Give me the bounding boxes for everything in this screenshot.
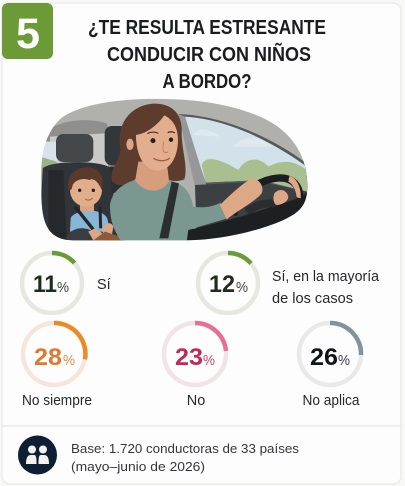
side window (178, 114, 310, 197)
chart: 23% No (164, 323, 226, 385)
chart: 12% Sí, en la mayoría de los casos (198, 253, 258, 313)
door (195, 182, 306, 230)
child (70, 211, 110, 232)
title: CONDUCIR CON NIÑOS (107, 43, 311, 66)
question number badge (2, 3, 53, 59)
question number badge: 5 (16, 10, 40, 58)
chart: 26% No aplica: 26 (310, 344, 338, 371)
chart: 23% No: % (203, 352, 215, 369)
mother neck and face (135, 162, 169, 191)
label: No siempre: No siempre (22, 393, 92, 409)
label: Sí, en la mayoría de los casos: de los casos (272, 291, 353, 307)
label: Sí, en la mayoría de los casos (272, 269, 380, 307)
mother sweater (110, 180, 227, 242)
chart: 28% No siempre: 28 (34, 344, 62, 371)
chart: 28% No siempre (23, 323, 85, 385)
seat belt (159, 182, 179, 238)
rear seat (39, 162, 125, 242)
base note: (mayo–junio de 2026) (71, 459, 205, 474)
base note (71, 441, 299, 474)
title: A BORDO? (162, 71, 252, 93)
label: No aplica: No aplica (302, 393, 360, 409)
chart: 26% No aplica: % (338, 352, 350, 369)
chart: 23% No: 23 (175, 344, 203, 371)
hands and cuff (220, 178, 262, 219)
icon: people (18, 436, 57, 474)
driver headrest (104, 126, 122, 166)
label: Sí: Sí (97, 277, 111, 293)
chart: 11% Sí (22, 253, 82, 313)
chart: 26% No aplica (299, 323, 361, 385)
steering wheel (233, 178, 299, 215)
title (88, 17, 326, 93)
chart: 12% Sí, en la mayoría de los casos: 12 (209, 271, 235, 298)
label: Sí, en la mayoría de los casos: Sí, en la mayoría (272, 269, 380, 285)
dashboard (187, 192, 310, 243)
mother hair (111, 104, 186, 185)
chart: 12% Sí, en la mayoría de los casos: % (236, 279, 248, 296)
label: No: No (187, 393, 205, 409)
chart: 28% No siempre: % (63, 352, 75, 369)
chart: 11% Sí: % (57, 279, 69, 296)
title: ¿TE RESULTA ESTRESANTE (88, 17, 326, 39)
illustration: mother driving with child in back seat (37, 97, 313, 243)
base note: Base: 1.720 conductoras de 33 países (71, 441, 299, 456)
chart: 11% Sí: 11 (33, 271, 57, 298)
